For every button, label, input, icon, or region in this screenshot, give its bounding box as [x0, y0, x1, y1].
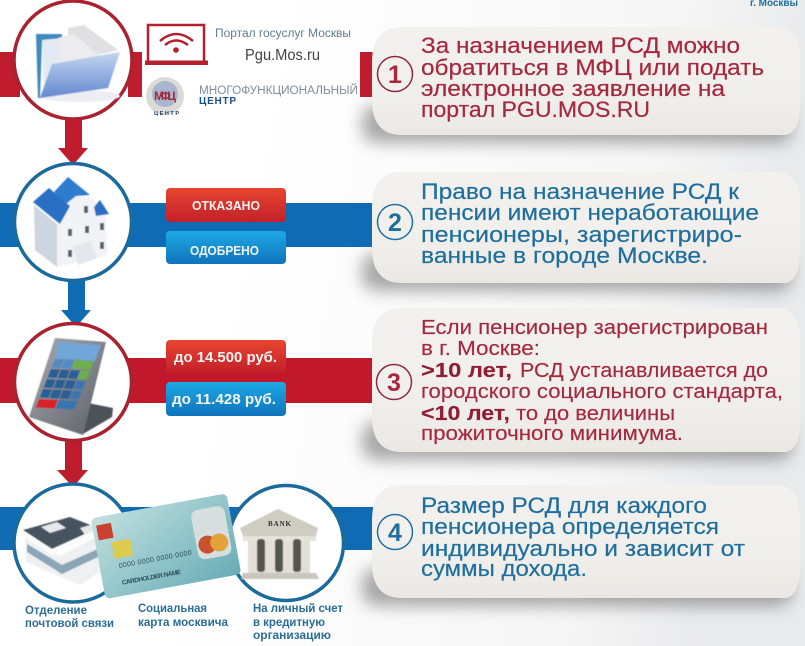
- card holder: CARDHOLDER NAME: [121, 569, 182, 587]
- icon: MFC logo: [146, 77, 184, 117]
- panel 4: [362, 485, 800, 606]
- panel 2 text: [421, 179, 759, 268]
- icon: house: [33, 177, 109, 267]
- icon: MFC logo: ЦЕНТР: [154, 111, 179, 117]
- button: одобрено: ОДОБРЕНО: [190, 244, 259, 258]
- panel 4 text: индивидуально и зависит от: [421, 536, 745, 561]
- panel 2 text: пенсионеры, зарегистриро-: [421, 222, 742, 247]
- card number: 0000 0000 0000 0000: [118, 550, 192, 570]
- caption: post office: [25, 605, 114, 630]
- caption: social card: карта москвича: [138, 617, 229, 629]
- portal url: Pgu.Mos.ru: [245, 47, 320, 64]
- icon: tablet calculator: [29, 338, 113, 435]
- number 4: 4: [388, 519, 402, 547]
- card chip: [111, 539, 133, 559]
- card payment panel: [190, 505, 233, 560]
- number 1: 1: [388, 61, 402, 89]
- panel 1: [362, 27, 800, 143]
- panel 2 text: Право на назначение РСД к: [421, 179, 739, 204]
- button: до 14.500: [166, 340, 286, 373]
- row 1 red band: [0, 52, 380, 97]
- panel 3 text: то до величины: [516, 402, 675, 425]
- button: до 11.428: до 11.428 руб.: [172, 392, 276, 408]
- circle 4 with post office icon: [14, 484, 132, 602]
- arrow 2: [61, 280, 91, 327]
- button: отказано: ОТКАЗАНО: [192, 199, 260, 213]
- number 2: 2: [388, 209, 402, 237]
- icon: laptop wifi: [145, 25, 208, 65]
- number 1: [378, 56, 412, 92]
- panel 2: [362, 172, 800, 291]
- caption: post office: Отделение: [25, 605, 87, 617]
- caption: bank account: [253, 603, 343, 642]
- bank label: BANK: [268, 520, 292, 528]
- circle 2 with house icon: [14, 164, 132, 280]
- panel 1 text: [421, 33, 764, 122]
- caption: bank account: На личный счет: [253, 603, 343, 615]
- icon: post office building: [23, 517, 100, 585]
- panel 3 text: РСД устанавливается до: [520, 359, 768, 382]
- MFC block: [146, 77, 358, 117]
- panel 1 text: За назначением РСД можно: [421, 33, 740, 58]
- icon: bank: [240, 509, 319, 579]
- number 3: [376, 364, 412, 400]
- button: до 11.428: [166, 382, 286, 416]
- MFC name: МНОГОФУНКЦИОНАЛЬНЫЙ: [199, 84, 358, 97]
- caption: social card: Социальная: [138, 603, 207, 615]
- portal block: [145, 25, 351, 65]
- number 2: [378, 204, 412, 240]
- icon: folder: [36, 25, 120, 102]
- circle 1 with folder icon: [14, 1, 132, 119]
- number 4: [378, 514, 412, 550]
- panel 4 text: Размер РСД для каждого: [421, 493, 707, 518]
- portal name: Портал госуслуг Москвы: [215, 28, 351, 40]
- button: до 14.500: до 14.500 руб.: [174, 350, 277, 366]
- panel 4 text: [421, 493, 745, 581]
- panel 3: [362, 308, 800, 460]
- caption: bank account: организацию: [253, 630, 331, 642]
- number 3: 3: [387, 369, 401, 397]
- panel 3 text: [421, 316, 783, 445]
- circle 3 with tablet icon: [14, 324, 132, 440]
- panel 3 text: в г. Москве:: [421, 337, 540, 360]
- icon: MFC logo: МФЦ: [154, 89, 176, 103]
- panel 2 text: ванные в городе Москве.: [421, 243, 708, 268]
- panel 3 text: городского социального стандарта,: [421, 380, 783, 403]
- panel 3 text: <10 лет,: [421, 402, 510, 425]
- caption: bank account: в кредитную: [253, 617, 325, 629]
- button: одобрено: [166, 231, 286, 264]
- panel 1 text: обратиться в МФЦ или подать: [421, 55, 764, 80]
- caption: social card: [138, 603, 229, 629]
- panel 2 text: пенсии имеют неработающие: [421, 200, 759, 225]
- card logo: [96, 523, 114, 540]
- caption: post office: почтовой связи: [25, 618, 114, 630]
- row 3 red band: [0, 358, 380, 403]
- row 2 blue band: [0, 203, 380, 247]
- panel 4 text: суммы дохода.: [421, 556, 587, 581]
- mastercard logo: [197, 532, 230, 555]
- panel 1 text: электронное заявление на: [421, 76, 726, 101]
- arrow 1: [58, 118, 88, 165]
- social card: [91, 493, 241, 599]
- circle 5 with bank icon: [228, 486, 344, 600]
- arrow 3: [57, 441, 88, 487]
- MFC centre: ЦЕНТР: [199, 96, 236, 107]
- panel 3 text: Если пенсионер зарегистрирован: [421, 316, 768, 339]
- panel 3 text: прожиточного минимума.: [421, 422, 683, 445]
- panel 1 text: портал PGU.MOS.RU: [421, 97, 650, 122]
- button: отказано: [166, 188, 286, 222]
- panel 4 text: пенсионера определяется: [421, 514, 719, 539]
- panel 3 text: >10 лет,: [421, 359, 512, 382]
- row 4 blue band: [0, 507, 380, 550]
